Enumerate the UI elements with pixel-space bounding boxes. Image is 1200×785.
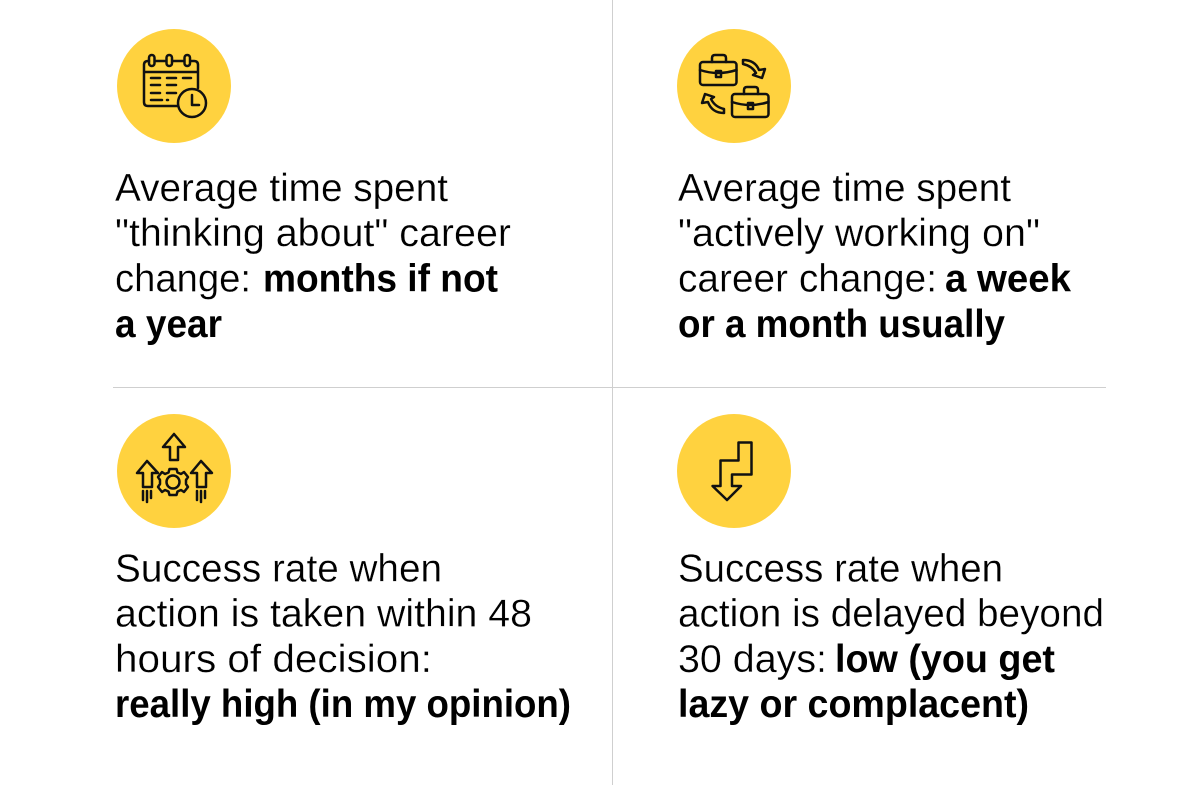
- text: action delayed beyond 30 days: [678, 548, 1104, 726]
- text: action delayed beyond 30 days: lazy or complacent): [678, 683, 1029, 726]
- text: thinking about: "thinking about" career: [115, 212, 511, 255]
- panel: time spent actively working: [677, 29, 1072, 346]
- panel: time spent thinking: [115, 29, 511, 346]
- text: actively working on: career change:: [678, 258, 937, 300]
- icon: rising arrows and gear: [117, 414, 231, 528]
- panel: success rate beyond 30 days: [677, 414, 1104, 726]
- text: thinking about: change:: [115, 258, 251, 300]
- text: actively working on: "actively working on": [678, 212, 1040, 255]
- icon: swapping briefcases: [677, 29, 791, 143]
- icon: stepped down arrow: [677, 414, 791, 528]
- icon: calendar with clock: [117, 29, 231, 143]
- text: actively working on: [678, 167, 1072, 346]
- text: action within 48 hours: [115, 548, 571, 726]
- text: action within 48 hours: Success rate when: [115, 548, 442, 590]
- text: action delayed beyond 30 days: 30 days:: [678, 638, 827, 681]
- text: action delayed beyond 30 days: action is delayed beyond: [678, 592, 1104, 636]
- text: actively working on: Average time spent: [678, 167, 1011, 210]
- text: action delayed beyond 30 days: Success rate when: [678, 548, 1003, 590]
- text: thinking about: a year: [115, 303, 222, 346]
- panel: success rate within 48 hours: [115, 414, 571, 726]
- text: action within 48 hours: really high (in my opinion): [115, 683, 571, 726]
- text: action within 48 hours: action is taken within 48: [115, 592, 532, 636]
- text: action within 48 hours: hours of decision:: [115, 638, 432, 681]
- text: thinking about: months if not: [263, 258, 498, 300]
- text: thinking about: [115, 167, 511, 346]
- text: action delayed beyond 30 days: low (you get: [835, 638, 1055, 681]
- text: thinking about: Average time spent: [115, 167, 448, 210]
- text: actively working on: a week: [945, 258, 1072, 300]
- text: actively working on: or a month usually: [678, 303, 1006, 346]
